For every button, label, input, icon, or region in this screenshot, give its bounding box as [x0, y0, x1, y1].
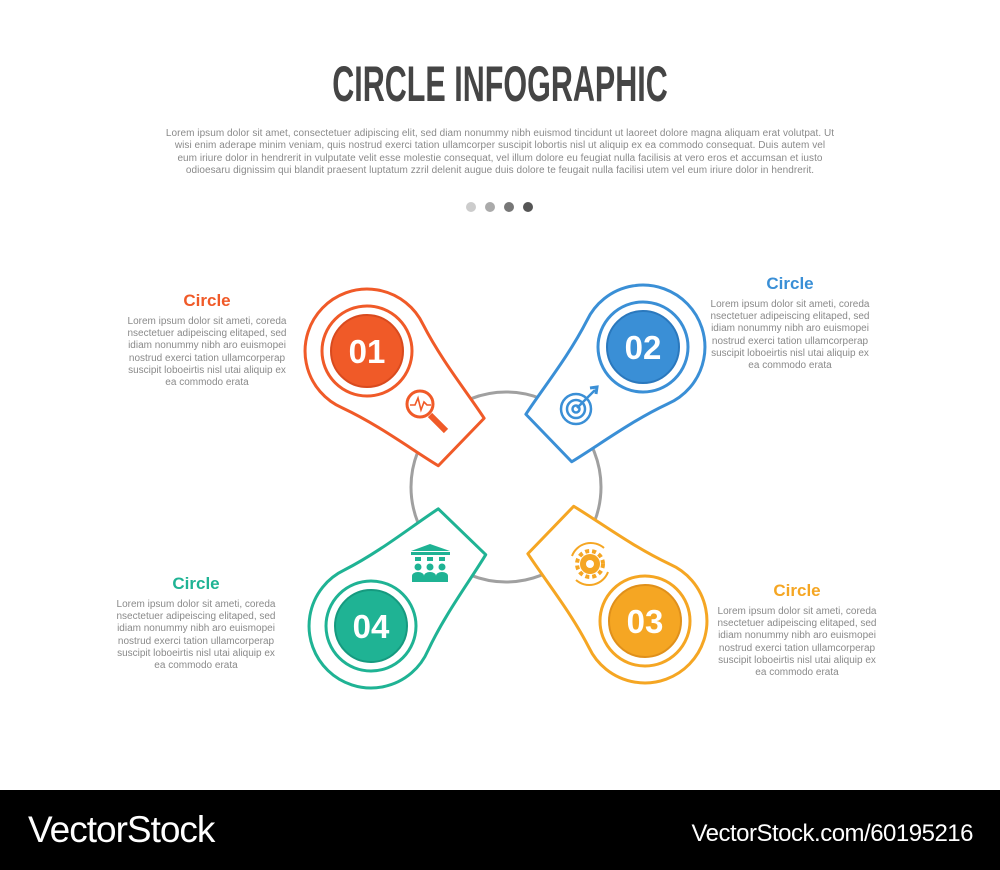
footer bar [0, 790, 1000, 870]
text block: circle 04: Circle [172, 574, 220, 593]
text block: circle 03: Circle [773, 581, 821, 600]
center circle [411, 392, 601, 582]
title: CIRCLE INFOGRAPHIC [332, 56, 668, 112]
text block: circle 02: Circle [766, 274, 814, 293]
footer logo: VectorStock [28, 809, 214, 850]
text block: circle 03: Lorem ipsum dolor sit ameti, coreda nsectetuer adipeiscing elitaped, sed idiam nonummy nibh aro euismopei nostrud exerci tation ullamcorperap suscipit loboeirtis nisl utai aliquip ex ea commodo erata [718, 606, 876, 678]
shape 04 [283, 489, 507, 714]
shape 04: 04 [353, 608, 390, 645]
intro paragraph: Lorem ipsum dolor sit amet, consectetuer adipiscing elit, sed diam nonummy nibh euismod tincidunt ut laoreet dolore magna aliquam erat volutpat. Ut wisi enim aderape minim veniam, quis nostrud exerci tation ullamcorper suscipit lobortis nisl ut aliquip ex ea commodo consequat. Duis autem vel eum iriure dolor in hendrerit in vulputate velit esse molestie consequat, vel illum dolore eu feugiat nulla facilisis at vero eros et accumsan et iusto odioesaru dignissim qui blandit praesent luptatum zzril delenit augue duis dolore te feugait nulla facilisi utem vel eum iriure dolor in hendrerit. [166, 128, 834, 176]
text block: circle 01: Lorem ipsum dolor sit ameti, coreda nsectetuer adipeiscing elitaped, sed idiam nonummy nibh aro euismopei nostrud exerci tation ullamcorperap suscipit loboeirtis nisl utai aliquip ex ea commodo erata [128, 316, 286, 388]
text block: circle 02: Lorem ipsum dolor sit ameti, coreda nsectetuer adipeiscing elitaped, sed idiam nonummy nibh aro euismopei nostrud exerci tation ullamcorperap suscipit loboeirtis nisl utai aliquip ex ea commodo erata [710, 299, 870, 371]
icon: gear cycle [572, 543, 608, 585]
footer url: VectorStock.com/60195216 [691, 820, 973, 847]
text block: circle 01: Circle [183, 291, 231, 310]
icon: building with people [411, 544, 450, 582]
shape 02: 02 [625, 329, 661, 366]
shape 02 [506, 259, 731, 483]
shape 03 [508, 485, 733, 709]
icon: target [561, 387, 597, 424]
pagination dots [466, 202, 533, 212]
shape 01 [279, 263, 504, 487]
shape 01: 01 [349, 333, 385, 370]
shape 03: 03 [627, 603, 663, 640]
text block: circle 04: Lorem ipsum dolor sit ameti, coreda nsectetuer adipeiscing elitaped, sed idiam nonummy nibh aro euismopei nostrud exerci tation ullamcorperap suscipit loboeirtis nisl utai aliquip ex ea commodo erata [116, 599, 276, 671]
icon: magnifier [407, 391, 446, 431]
